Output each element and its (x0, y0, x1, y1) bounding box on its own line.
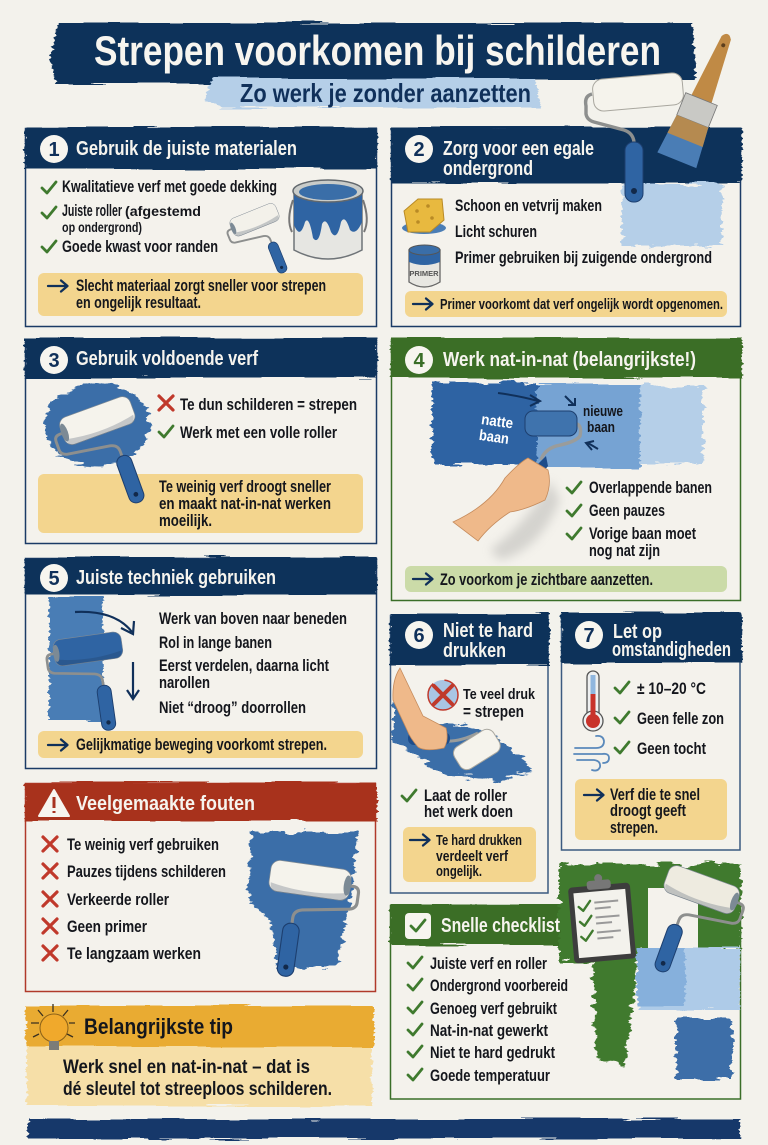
icon: warning (39, 790, 69, 816)
heading 2: ondergrond (443, 158, 533, 180)
number 4: 4 (413, 350, 425, 372)
callout 1 (38, 273, 363, 316)
list 4: nog nat zijn (589, 542, 660, 560)
icon: roller fouten (256, 859, 361, 985)
number 5 (40, 564, 68, 592)
icon: roller checklist (635, 863, 750, 991)
icon: small roller (223, 202, 300, 287)
icon: primer can: PRIMER (409, 269, 439, 278)
callout 7: Verf die te snel (610, 786, 700, 804)
callout 3: moeilijk. (159, 512, 212, 530)
list 2 (455, 197, 712, 267)
header 2 (391, 127, 742, 183)
icon: roller and hand (453, 411, 581, 541)
heading 5: Juiste techniek gebruiken (76, 567, 276, 589)
callout 3: Te weinig verf droogt sneller (159, 478, 331, 496)
list 5: narollen (159, 674, 210, 692)
icon: clipboard (567, 871, 636, 964)
subtitle: Zo werk je zonder aanzetten (240, 78, 531, 108)
icon: red cross (428, 680, 458, 710)
heading 1: Gebruik de juiste materialen (76, 138, 297, 160)
number 2: 2 (413, 139, 425, 161)
list 4: Overlappende banen (589, 479, 712, 497)
arrows 5 (75, 612, 139, 699)
callout 7: strepen. (610, 819, 658, 837)
callout 6 (403, 827, 536, 882)
list 1: Juiste roller (62, 202, 122, 220)
list 1: Kwalitatieve verf met goede dekking (62, 178, 277, 196)
callout 3: en maakt nat-in-nat werken (159, 495, 331, 513)
header 1 (25, 127, 377, 169)
icon: wind (574, 736, 609, 771)
heading 7: Let op (613, 621, 662, 643)
list checklist: Ondergrond voorbereid (430, 977, 568, 995)
illustration: roller and brush (586, 26, 747, 202)
number 7: 7 (583, 625, 595, 647)
list 2: Licht schuren (455, 223, 537, 241)
list checklist (408, 955, 568, 1085)
heading 7 (612, 621, 731, 661)
subtitle band (205, 78, 541, 108)
header 6 (390, 614, 549, 665)
heading fouten: Veelgemaakte fouten (76, 793, 255, 815)
list 4: Vorige baan moet (589, 525, 696, 543)
icon: roller 3 (49, 394, 164, 522)
list 7: Geen felle zon (637, 710, 724, 728)
list checklist: Niet te hard gedrukt (430, 1044, 555, 1062)
callout 4 (405, 566, 727, 592)
icon: thermometer (583, 671, 603, 731)
paint patch fouten (248, 832, 358, 968)
list fouten: Te weinig verf gebruiken (67, 836, 219, 854)
list 4: Geen pauzes (589, 502, 665, 520)
callout 5: Gelijkmatige beweging voorkomt strepen. (76, 736, 327, 754)
label: natte baan: baan (478, 427, 510, 448)
header 5 (25, 557, 377, 595)
list 1 (42, 178, 277, 256)
paint patches (637, 888, 740, 1080)
tip header (26, 1006, 374, 1046)
icon: roller 5 (44, 631, 134, 737)
tip body (27, 1044, 372, 1106)
tip text: Werk snel en nat-in-nat – dat is (63, 1057, 310, 1078)
list 5: Eerst verdelen, daarna licht (159, 657, 329, 675)
label: nieuwe baan (583, 403, 623, 436)
panel 3: voldoende verf (25, 338, 377, 544)
number 4 (405, 346, 433, 374)
callout 5 (38, 731, 363, 758)
icon: paint can (289, 180, 367, 259)
list 2: Schoon en vetvrij maken (455, 197, 602, 215)
label 6: Te veel druk (463, 686, 536, 703)
number 1: 1 (48, 139, 60, 161)
icon: light bulb (31, 1004, 75, 1050)
label: nieuwe baan: baan (587, 419, 615, 436)
list 6: het werk doen (424, 803, 513, 821)
panel 2: ondergrond (391, 127, 742, 326)
callout 7 (575, 779, 727, 840)
heading 6: drukken (443, 640, 506, 662)
icon: paint brush (657, 26, 747, 168)
paint patch (622, 184, 722, 246)
heading 6: Niet te hard (443, 620, 533, 642)
callout 6: verdeelt verf (436, 848, 509, 865)
paint blob 3 (45, 383, 149, 467)
icon: primer can (409, 245, 440, 287)
panel 1: materialen (25, 127, 377, 326)
number 6 (405, 621, 433, 649)
panel 7: omstandigheden (561, 613, 742, 850)
footer bar (28, 1119, 740, 1139)
green header and paint (390, 864, 741, 1066)
callout 1: Slecht materiaal zorgt sneller voor strepen (76, 277, 326, 295)
list checklist: Genoeg verf gebruikt (430, 1000, 557, 1018)
list checklist: Nat-in-nat gewerkt (430, 1022, 548, 1040)
tip box (26, 1004, 374, 1106)
tip text: dé sleutel tot streeploos schilderen. (63, 1079, 332, 1100)
icon: sponge (402, 199, 446, 234)
list 1: op ondergrond) (62, 220, 142, 235)
list fouten: Geen primer (67, 918, 147, 936)
label 6 (463, 686, 536, 721)
icon: roller and hand 6 (393, 668, 503, 773)
list 5: Rol in lange banen (159, 634, 272, 652)
header fouten (25, 782, 377, 821)
list 7: Geen tocht (637, 740, 706, 758)
arrows on paint (498, 393, 598, 450)
list 4 (567, 479, 712, 560)
number 5: 5 (48, 568, 60, 590)
list 5: Niet “droog” doorrollen (159, 699, 306, 717)
number 2 (405, 135, 433, 163)
tip text (63, 1057, 332, 1100)
header 3 (25, 338, 377, 378)
title banner (50, 23, 696, 108)
label: nieuwe baan: nieuwe (583, 403, 623, 420)
callout 6: Te hard drukken (436, 832, 522, 849)
list checklist: Goede temperatuur (430, 1067, 550, 1085)
tip heading: Belangrijkste tip (84, 1014, 233, 1039)
list 1: (afgestemd (125, 204, 201, 219)
list 3 (159, 396, 357, 442)
list checklist: Juiste verf en roller (430, 955, 547, 973)
panel 5: techniek (25, 557, 377, 768)
callout 4: Zo voorkom je zichtbare aanzetten. (440, 571, 653, 589)
heading 3: Gebruik voldoende verf (76, 348, 258, 370)
panel 6: drukken (390, 614, 549, 893)
header 7 (561, 613, 742, 663)
callout 3 (38, 474, 363, 533)
list 6: Laat de roller (424, 787, 507, 805)
heading 2 (443, 138, 594, 180)
heading 2: Zorg voor een egale (443, 138, 594, 160)
heading checklist: Snelle checklist (441, 915, 560, 937)
list fouten: Pauzes tijdens schilderen (67, 863, 226, 881)
heading 7: omstandigheden (612, 639, 731, 661)
header 4 (391, 338, 742, 378)
list fouten (43, 836, 226, 963)
label: natte baan (478, 411, 514, 448)
number 7 (575, 621, 603, 649)
list 5: Werk van boven naar beneden (159, 610, 347, 628)
number 6: 6 (413, 625, 425, 647)
list 1: Goede kwast voor randen (62, 238, 218, 256)
callout 1: en ongelijk resultaat. (76, 294, 201, 312)
list 7: ± 10–20 °C (637, 680, 706, 698)
label: natte baan: natte (480, 411, 514, 432)
panel: fouten (25, 782, 377, 992)
paint strips (432, 382, 703, 468)
heading 4: Werk nat-in-nat (belangrijkste!) (443, 349, 696, 371)
paint band 5 (49, 597, 103, 721)
callout 7: droogt geeft (610, 802, 686, 820)
panel: checklist (390, 863, 750, 1099)
list fouten: Te langzaam werken (67, 945, 201, 963)
list 6 (402, 787, 513, 821)
number 1 (40, 135, 68, 163)
list 5 (159, 610, 347, 717)
paint blob 6 (393, 702, 532, 782)
callout 2 (405, 291, 727, 317)
number 3: 3 (48, 350, 60, 372)
list 3: Werk met een volle roller (180, 424, 337, 442)
title: Strepen voorkomen bij schilderen (94, 27, 661, 74)
panel 4: nat-in-nat (391, 338, 742, 600)
hand shadow (490, 480, 560, 560)
list 3: Te dun schilderen = strepen (180, 396, 357, 414)
label 6: = strepen (463, 703, 524, 721)
list 7 (615, 680, 724, 758)
callout 6: ongelijk. (436, 863, 482, 880)
list fouten: Verkeerde roller (67, 891, 169, 909)
number 3 (40, 346, 68, 374)
heading 6 (443, 620, 533, 662)
icon: check box (405, 913, 431, 939)
